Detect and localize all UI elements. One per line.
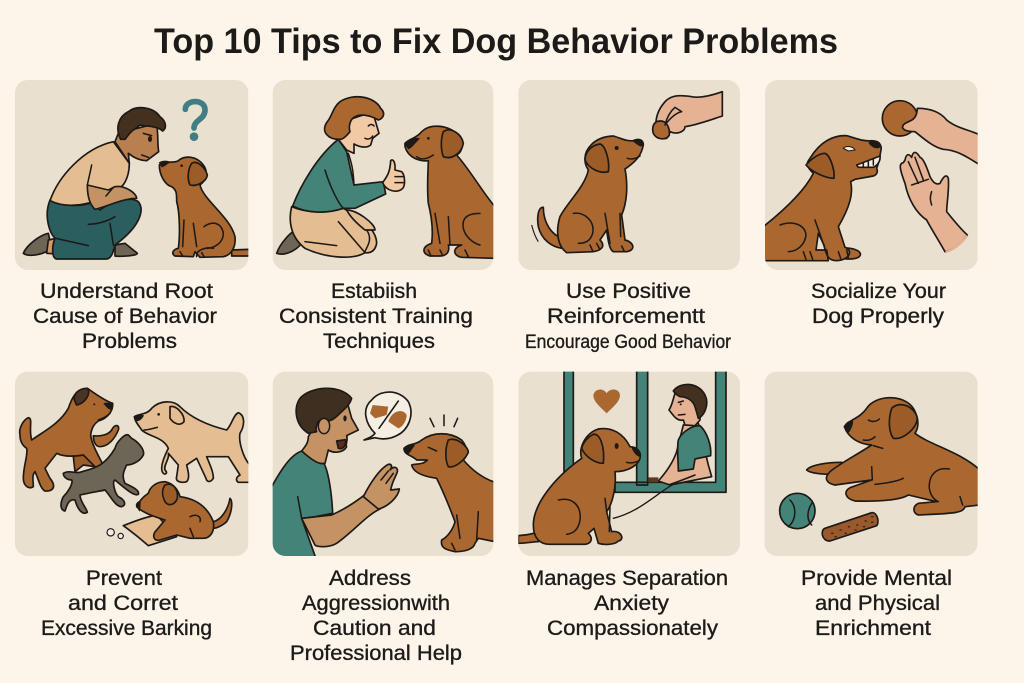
- caption: tip 1: Problems: [82, 330, 177, 353]
- icon: grey cat: [61, 435, 144, 513]
- caption: tip 8: [801, 567, 952, 640]
- caption: tip 5: Prevent: [86, 567, 162, 590]
- icon: kneeling man: [23, 108, 165, 259]
- icon: window frame: [564, 370, 726, 492]
- caption: tip 5: and Corret: [68, 592, 178, 615]
- caption: tip 1: Cause of Behavior: [33, 305, 217, 328]
- caption: tip 6: Address: [329, 567, 411, 590]
- caption: tip 6: Aggressionwith: [302, 592, 450, 615]
- caption: tip 5: Excessive Barking: [41, 617, 212, 640]
- caption: tip 4: Socialize Your: [811, 280, 946, 303]
- caption: tip 6: Caution and: [313, 617, 436, 640]
- icon: hand holding ball: [882, 101, 980, 165]
- panel: understand root cause illustration: [15, 80, 250, 270]
- caption: tip 4: Dog Properly: [812, 305, 945, 328]
- icon: kneeling woman: [277, 97, 405, 257]
- icon: man raising palm: [272, 388, 399, 558]
- icon: brown dog jumping: [20, 388, 119, 491]
- caption: tip 2: Estabiish: [331, 280, 417, 303]
- icon: chew stick: [822, 513, 878, 541]
- caption: tip 1: Understand Root: [40, 280, 213, 303]
- icon: speech bubble with crossed out bite: [364, 392, 411, 440]
- caption: tip 7: [526, 567, 728, 640]
- icon: puppy chewing cloth: [107, 482, 232, 546]
- caption: tip 8: Enrichment: [815, 617, 931, 640]
- caption: tip 8: Provide Mental: [801, 567, 952, 590]
- icon: barking dog: [404, 434, 495, 552]
- caption: tip 7: Compassionately: [547, 617, 719, 640]
- panel: consistent training illustration: [273, 80, 495, 270]
- icon: heart: [593, 390, 620, 413]
- icon: alert lines: [430, 415, 458, 427]
- panel: aggression illustration: [272, 372, 495, 558]
- caption: tip 2: Techniques: [323, 330, 435, 353]
- title: Top 10 Tips to Fix Dog Behavior Problems: [154, 22, 838, 61]
- icon: tan dog: [134, 402, 250, 482]
- caption: tip 8: and Physical: [815, 592, 940, 615]
- icon: person in window: [648, 384, 712, 485]
- icon: happy sitting dog: [532, 136, 643, 253]
- caption: tip 6: [290, 567, 462, 665]
- caption: tip 7: Manages Separation: [526, 567, 728, 590]
- caption: tip 2: [279, 280, 473, 353]
- caption: tip 1: [33, 280, 217, 353]
- icon: hand holding treat: [653, 92, 722, 139]
- panel: enrichment illustration: [764, 372, 980, 556]
- icon: sitting dog from behind window: [518, 429, 641, 544]
- caption: tip 3: Encourage Good Behavior: [525, 332, 732, 353]
- caption: tip 7: Anxiety: [594, 592, 670, 615]
- caption: tip 5: [41, 567, 212, 640]
- caption: tip 6: Professional Help: [290, 642, 462, 665]
- panel: separation anxiety illustration: [518, 370, 740, 556]
- icon: growling dog: [763, 136, 881, 261]
- caption: tip 3: [525, 280, 732, 353]
- icon: question mark: [185, 102, 205, 141]
- icon: open palm: [900, 152, 967, 252]
- panel: positive reinforcement illustration: [518, 80, 740, 270]
- icon: resting dog: [807, 398, 980, 515]
- icon: dog facing woman: [404, 126, 495, 258]
- icon: tennis ball: [780, 493, 815, 529]
- icon: leash: [613, 484, 673, 518]
- caption: tip 2: Consistent Training: [279, 305, 473, 328]
- icon: sitting dog: [159, 157, 250, 257]
- caption: tip 4: [811, 280, 946, 328]
- panel: excessive barking illustration: [15, 372, 250, 556]
- caption: tip 3: Use Positive: [566, 280, 691, 303]
- caption: tip 3: Reinforcementt: [547, 305, 705, 328]
- panel: socialize illustration: [763, 80, 980, 270]
